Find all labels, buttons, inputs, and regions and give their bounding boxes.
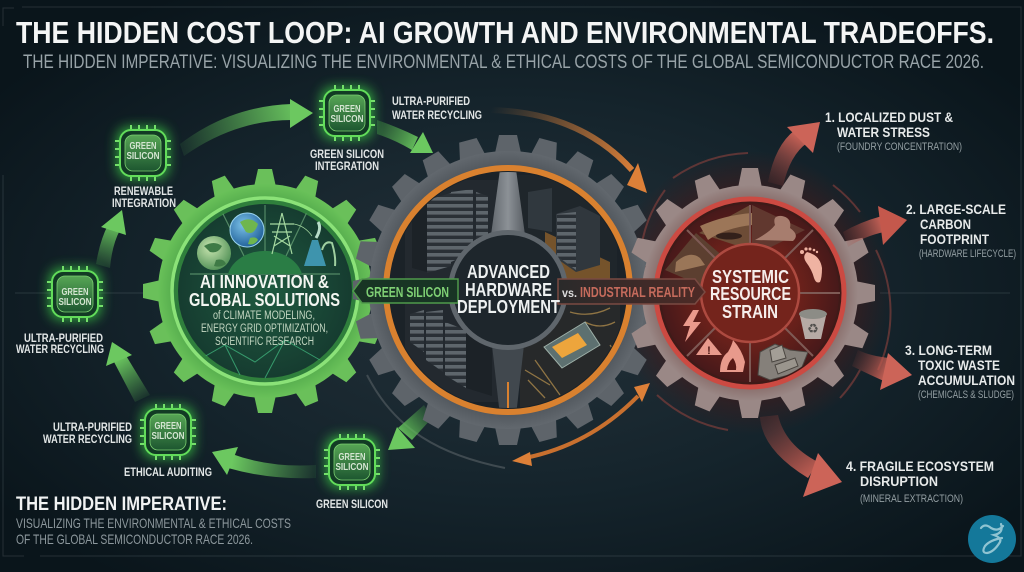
arrow: orange hardware to strain xyxy=(490,110,647,193)
arrow: hardware to green silicon xyxy=(388,405,432,450)
label: ultra-purified left xyxy=(16,333,104,356)
impact 4 text: 4. FRAGILE ECOSYSTEM xyxy=(846,458,994,474)
impact 2 text: CARBON xyxy=(920,216,971,232)
chip: green silicon xyxy=(324,434,380,490)
label band: industrial reality xyxy=(558,279,705,304)
faint orbit arcs xyxy=(640,153,891,430)
chip: green silicon: SILICON xyxy=(336,462,368,473)
hub heading: advanced hardware deployment: HARDWARE xyxy=(465,280,552,300)
text block: hidden imperative: THE HIDDEN IMPERATIVE: xyxy=(16,493,227,515)
arrow: impact 3 xyxy=(852,350,912,390)
impact 3 text: TOXIC WASTE xyxy=(918,357,1000,373)
label: ultra-purified top: ULTRA-PURIFIED xyxy=(392,96,470,108)
arrow: up to renewable integration xyxy=(96,210,126,268)
label band: industrial reality: INDUSTRIAL REALITY xyxy=(580,285,695,301)
label: renewable integration: RENEWABLE xyxy=(114,186,173,198)
gear: systemic resource strain xyxy=(625,168,875,418)
text: AI uses xyxy=(201,310,328,348)
label band: green silicon xyxy=(353,279,458,303)
gear: AI innovation: GLOBAL SOLUTIONS xyxy=(189,290,340,310)
chip: ethical auditing xyxy=(140,404,196,460)
hub heading: systemic resource strain: RESOURCE xyxy=(710,284,791,304)
impact 1 text: WATER STRESS xyxy=(837,124,930,140)
hub heading: systemic resource strain xyxy=(710,267,791,322)
chip: renewable integration: GREEN xyxy=(130,141,156,152)
label: green silicon integration: INTEGRATION xyxy=(315,161,379,173)
panel: server racks top right xyxy=(528,188,610,278)
text: AI uses: SCIENTIFIC RESEARCH xyxy=(215,336,314,348)
text block: hidden imperative xyxy=(16,493,291,547)
impact 2 text: 2. LARGE-SCALE xyxy=(906,201,1006,217)
label: ultra-purified left: ULTRA-PURIFIED xyxy=(24,333,103,345)
label: green silicon integration: GREEN SILICON xyxy=(310,149,384,161)
impact 4 text: (MINERAL EXTRACTION) xyxy=(860,493,963,505)
panel: server racks bottom left xyxy=(410,310,466,388)
chip: ethical auditing: GREEN xyxy=(154,421,182,432)
hub heading: advanced hardware deployment xyxy=(457,262,560,317)
impact 1 text: 1. LOCALIZED DUST & xyxy=(825,109,953,125)
arrow: integration to hardware xyxy=(377,120,433,153)
label: green silicon integration xyxy=(310,149,384,173)
label: ultra-purified lower: WATER RECYCLING xyxy=(43,434,132,446)
label: ultra-purified left: WATER RECYCLING xyxy=(16,344,104,356)
chip: ethical auditing: SILICON xyxy=(152,431,184,442)
arrow: impact 2 xyxy=(843,206,907,247)
impact 3 text xyxy=(905,342,1015,401)
icon: recycling bin xyxy=(799,309,827,339)
icon: fire xyxy=(720,340,745,372)
heading: AI innovation: AI INNOVATION & xyxy=(200,272,329,292)
hub heading: systemic resource strain: SYSTEMIC xyxy=(712,267,789,287)
chip: renewable integration xyxy=(115,125,171,181)
chip: ultra-purified water recycling xyxy=(47,266,103,322)
impact 1 text xyxy=(825,109,962,153)
gear: AI innovation xyxy=(143,169,387,413)
label: green silicon: GREEN SILICON xyxy=(316,499,388,511)
impact 4 text xyxy=(846,458,994,505)
text: AI uses: of CLIMATE MODELING, xyxy=(213,310,315,322)
icon: warning triangle xyxy=(696,338,722,355)
label band: green silicon: GREEN SILICON xyxy=(366,285,449,301)
impact 3 text: 3. LONG-TERM xyxy=(905,342,992,358)
panel: circuit board and chip xyxy=(520,302,620,407)
spoke: top xyxy=(491,172,525,232)
panel: server racks top left xyxy=(427,189,488,273)
label: ultra-purified lower xyxy=(43,422,132,446)
chip: green silicon integration: SILICON xyxy=(330,114,364,125)
text block: hidden imperative: VISUALIZING THE ENVIRONMENTAL & ETHICAL COSTS xyxy=(16,515,291,531)
icon: green globe xyxy=(197,236,231,270)
label: renewable integration xyxy=(112,186,176,210)
chip: green silicon: GREEN xyxy=(338,452,366,463)
label: ultra-purified top: WATER RECYCLING xyxy=(392,110,482,122)
chip: renewable integration: SILICON xyxy=(126,151,160,162)
gear: advanced hardware xyxy=(353,135,663,445)
arrow: silicon integration to renewable xyxy=(180,99,313,156)
impact 2 text xyxy=(906,201,1016,260)
icon: footprint xyxy=(800,247,822,282)
label band: industrial reality: vs. xyxy=(562,288,577,300)
panel: mining pit xyxy=(665,233,720,284)
icon: lab flasks xyxy=(304,222,335,266)
icon: blue earth xyxy=(230,213,264,247)
arrow: green silicon to ethical auditing xyxy=(212,447,316,478)
hub heading: advanced hardware deployment: ADVANCED xyxy=(467,262,550,282)
panel: smoke cloud xyxy=(752,205,805,250)
hub heading: systemic resource strain: STRAIN xyxy=(722,302,778,322)
impact 4 text: DISRUPTION xyxy=(860,473,938,489)
logo badge xyxy=(968,515,1016,563)
icon: rubble xyxy=(758,344,808,380)
panel: crater landscape xyxy=(699,206,752,245)
icon: power pylon xyxy=(270,213,312,254)
impact 1 text: (FOUNDRY CONCENTRATION) xyxy=(837,141,962,153)
icon: recycling bin: ♻ xyxy=(807,321,819,336)
arrow: up to ultra-purified recycling xyxy=(106,342,150,402)
label: ultra-purified lower: ULTRA-PURIFIED xyxy=(53,422,132,434)
text block: hidden imperative: OF THE GLOBAL SEMICONDUCTOR RACE 2026. xyxy=(16,531,253,547)
hub heading: advanced hardware deployment: DEPLOYMENT xyxy=(457,297,560,317)
chip: green silicon integration xyxy=(319,85,375,141)
label: renewable integration: INTEGRATION xyxy=(112,198,176,210)
chip: ultra-purified water recycling: SILICON xyxy=(58,297,92,308)
label: ultra-purified top xyxy=(392,96,482,122)
label: ethical auditing: ETHICAL AUDITING xyxy=(124,467,212,479)
chip: ultra-purified water recycling: GREEN xyxy=(62,287,88,298)
arrow: orange double headed feedback xyxy=(512,383,650,466)
arrow: impact 1 xyxy=(768,122,820,186)
chip: green silicon integration: GREEN xyxy=(334,104,360,115)
icon: warning triangle: ! xyxy=(707,345,711,357)
icon: lightning xyxy=(683,310,701,342)
impact 2 text: FOOTPRINT xyxy=(920,231,989,247)
text: AI uses: ENERGY GRID OPTIMIZATION, xyxy=(201,323,328,335)
spoke: bottom xyxy=(492,348,524,408)
arrow: impact 4 xyxy=(760,415,842,497)
red gear halo xyxy=(608,151,892,435)
